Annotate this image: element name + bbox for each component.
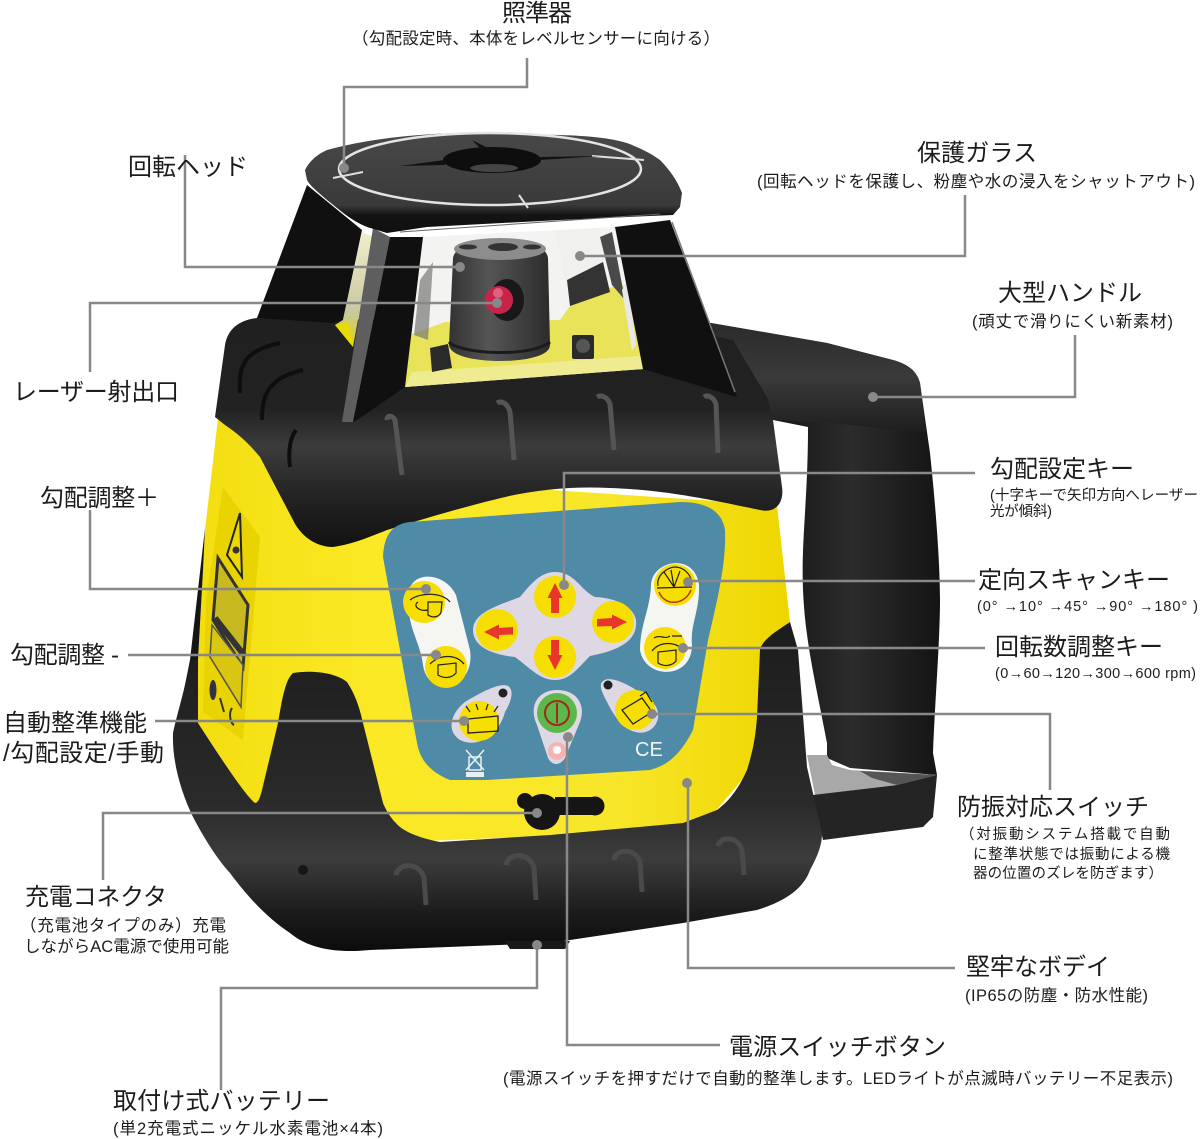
upper black bumper <box>215 318 782 547</box>
label: sighting device: 照準器 <box>502 0 572 27</box>
label: power switch button <box>503 1034 1173 1088</box>
label: sturdy body: (IP65の防塵・防水性能) <box>965 986 1148 1005</box>
label: directional scan key <box>977 567 1198 615</box>
label: anti-vibration switch: （対振動システム搭載で自動 <box>960 825 1170 843</box>
teardrop: anti-vibration key <box>601 679 658 733</box>
teardrop: auto leveling key <box>452 685 512 743</box>
label: slope adjust minus: 勾配調整 - <box>10 642 119 669</box>
label: power switch button: 電源スイッチボタン <box>729 1034 946 1061</box>
leader dots <box>339 163 878 950</box>
label: detachable battery: 取付け式バッテリー <box>113 1088 330 1115</box>
label: sighting device <box>352 0 720 48</box>
label: rotation speed key: 回転数調整キー <box>995 634 1163 661</box>
left metal strut <box>342 228 390 422</box>
side glass <box>335 232 373 347</box>
label: protective glass: (回転ヘッドを保護し、粉塵や水の浸入をシャットアウト) <box>757 172 1195 191</box>
label: power switch button: (電源スイッチを押すだけで自動的整準します。LEDライトが点滅時バッテリー不足表示) <box>503 1069 1173 1088</box>
label: directional scan key: 定向スキャンキー <box>978 567 1170 594</box>
control panel <box>383 502 725 780</box>
top plate with sighting ring <box>305 133 682 233</box>
tower legs <box>257 185 737 422</box>
rotating head with laser aperture <box>449 238 550 361</box>
label: large handle: 大型ハンドル <box>998 280 1142 307</box>
label: anti-vibration switch: 器の位置のズレを防ぎます） <box>973 865 1163 882</box>
leader lines <box>90 58 1075 1090</box>
back strip <box>178 528 205 730</box>
label: charging connector: しながらAC電源で使用可能 <box>24 937 229 956</box>
label: charging connector: 充電コネクタ <box>25 884 167 911</box>
label: detachable battery: (単2充電式ニッケル水素電池×4本) <box>113 1119 383 1138</box>
handle metal wedge <box>807 755 937 795</box>
label: large handle <box>972 280 1173 331</box>
charging connector <box>517 793 604 830</box>
label: sturdy body <box>965 954 1148 1005</box>
label: protective glass: 保護ガラス <box>917 140 1037 167</box>
label: anti-vibration switch: 防振対応スイッチ <box>957 794 1149 821</box>
laser level device <box>173 133 940 951</box>
label: charging connector <box>20 884 229 956</box>
battery tab <box>505 941 570 949</box>
label: slope adjust plus: 勾配調整＋ <box>40 485 159 512</box>
label: anti-vibration switch: に整準状態では振動による機 <box>973 846 1170 863</box>
label: sturdy body: 堅牢なボデイ <box>966 954 1110 981</box>
protective glass window <box>405 227 643 387</box>
left capsule: slope adjust keys <box>403 577 471 688</box>
label: rotation speed key <box>995 634 1196 682</box>
label: rotating head: 回転ヘッド <box>128 154 248 181</box>
CE mark: CE <box>635 739 663 761</box>
label: laser emission port: レーザー射出口 <box>13 379 179 406</box>
label: slope setting key: (十字キーで矢印方向へレーザー <box>990 487 1198 504</box>
yellow body <box>198 418 790 842</box>
label: anti-vibration switch <box>957 794 1170 882</box>
handle <box>705 322 940 840</box>
label: sighting device: （勾配設定時、本体をレベルセンサーに向ける） <box>352 29 720 48</box>
power button with LED <box>534 690 582 764</box>
right capsule: scan and speed keys <box>640 563 699 672</box>
cross pad: direction keys <box>473 572 636 680</box>
label: auto leveling function <box>3 710 164 767</box>
lower black bumper <box>173 622 822 951</box>
label: rotation speed key: (0→60→120→300→600 rpm) <box>995 666 1196 682</box>
label: large handle: (頑丈で滑りにくい新素材) <box>972 312 1173 331</box>
label: slope setting key: 勾配設定キー <box>990 456 1134 483</box>
side warning label <box>203 487 260 740</box>
label: slope setting key <box>990 456 1198 520</box>
label: slope setting key: 光が傾斜) <box>990 503 1052 520</box>
handle base plate <box>813 775 937 840</box>
label: directional scan key: (0° →10° →45° →90° →180° ) <box>977 599 1198 615</box>
label: protective glass <box>757 140 1195 191</box>
label: auto leveling function: 自動整準機能 <box>3 710 147 737</box>
WEEE symbol <box>466 750 484 777</box>
label: detachable battery <box>113 1088 383 1138</box>
label: auto leveling function: /勾配設定/手動 <box>3 740 164 767</box>
label: charging connector: （充電池タイプのみ）充電 <box>20 916 226 935</box>
